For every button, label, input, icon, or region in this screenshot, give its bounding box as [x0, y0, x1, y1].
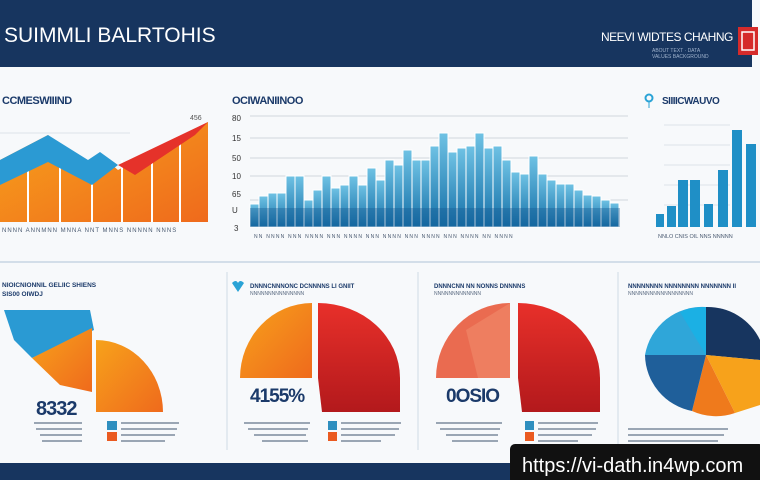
- panel: bottom 1: [2, 282, 179, 442]
- panel: column chart: 10: [232, 172, 241, 181]
- panel: column chart: 3: [234, 224, 239, 233]
- header subtitle: VALUES BACKGROUND: [652, 54, 709, 60]
- panel: column chart: OCIWANIINOO: [232, 95, 304, 107]
- watermark: [510, 444, 760, 480]
- panel: column chart: 80: [232, 114, 241, 123]
- panel: bottom 1: NIOICNIONNIL GELIIC SHIENS: [2, 282, 97, 289]
- header bar: [0, 0, 758, 67]
- panel: bar chart right: SIIIICWAUVO: [662, 96, 720, 107]
- header subtitle: NEEVI WIDTES CHAHNG: [601, 30, 733, 44]
- panel: column chart: 15: [232, 134, 241, 143]
- panel: column chart: 50: [232, 154, 241, 163]
- panel: bottom 2: [232, 281, 401, 442]
- panel: column chart: NN NNNN NNN NNNN NNN NNNN NNN NNNN NNN NNNN NNN NNNN NN NNNN: [254, 234, 514, 240]
- panel: bottom 3: [434, 284, 600, 442]
- title: SUIMMLI BALRTOHIS: [4, 24, 216, 47]
- panel: bottom 4 pie: NNNNNNNNNNNNNNNNNN: [628, 291, 693, 297]
- watermark: https://vi-dath.in4wp.com: [522, 455, 743, 477]
- icon: pin: [646, 94, 652, 108]
- panel: bottom 3: DNNNCNN NN NONNS DNNNNS: [434, 284, 525, 290]
- icon: red badge: [738, 27, 758, 55]
- icon: heart: [232, 281, 244, 292]
- footer bar: [0, 463, 760, 480]
- panel: bottom 2: DNNNCNNNONC DCNNNNS LI GNIIT: [250, 284, 355, 290]
- panel: bottom 4 pie: [628, 284, 760, 442]
- panel: column chart: 65: [232, 190, 241, 199]
- panel: bottom 3: NNNNNNNNNNNNN: [434, 291, 481, 297]
- panel: area chart: CCMESWIIIND: [2, 95, 72, 107]
- panel: column chart: U: [232, 206, 238, 215]
- panel: bottom 2: NNNNNNNNNNNNNNN: [250, 291, 305, 297]
- header subtitle: [601, 30, 733, 60]
- panel: bottom 1: 8332: [36, 398, 77, 420]
- panel: bar chart right: [646, 94, 756, 240]
- panel: bottom 4 pie: NNNNNNNN NNNNNNNN NNNNNNN II: [628, 284, 736, 290]
- panel: bottom 3: 0OSIO: [446, 386, 499, 407]
- panel: bottom 1: SIS00 OIWDJ: [2, 291, 43, 298]
- header subtitle: ABOUT TEXT · DATA: [652, 48, 701, 54]
- panel: area chart: NNNN ANNMNN MNNA NNT MNNS NNNNN NNNS: [2, 228, 177, 234]
- panel: bar chart right: NNLO CNIS OIL NNS NNNNN: [658, 234, 733, 240]
- panel: column chart: [232, 95, 628, 240]
- panel: area chart: [0, 95, 208, 234]
- panel: bottom 2: 4155%: [250, 386, 305, 407]
- panel: area chart: 456: [190, 115, 202, 122]
